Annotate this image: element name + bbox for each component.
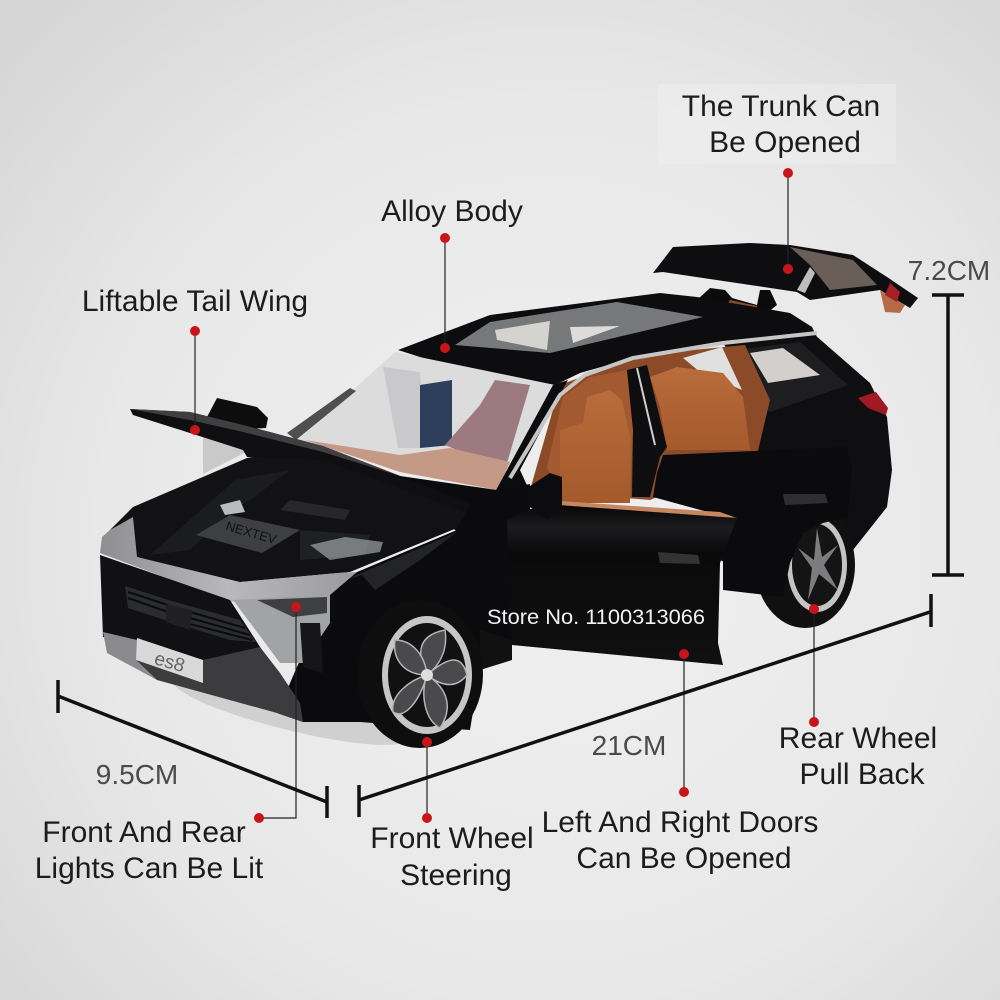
car model: NEXTEV: [224, 518, 279, 547]
windshield: [298, 352, 555, 490]
front seat: [560, 390, 630, 503]
side vent: [300, 623, 323, 673]
roof: [398, 293, 817, 385]
passenger figure: [383, 367, 424, 448]
label: trunk: [658, 84, 896, 274]
sunroof glass: [455, 302, 703, 353]
interior: [530, 345, 770, 500]
label: trunk: Be Opened: [709, 126, 861, 159]
a pillar far side: [287, 388, 356, 440]
fender highlight: [345, 532, 457, 590]
label: trunk: The Trunk Can: [682, 90, 880, 123]
label: alloy body: Alloy Body: [381, 195, 523, 228]
hood: [130, 409, 470, 512]
door pillar: [627, 365, 667, 497]
rear window surround: [735, 342, 848, 412]
coolant tanks: [220, 500, 245, 515]
label: lights: Front And Rear: [42, 816, 246, 849]
rear seats: [650, 367, 750, 450]
rear side window: [750, 348, 820, 383]
rear wheel: [755, 502, 855, 628]
rear quarter body: [720, 335, 892, 600]
a pillar near side: [495, 380, 568, 492]
label: lights: Lights Can Be Lit: [35, 852, 264, 885]
rear opening light: [683, 347, 742, 390]
label: doors: [542, 649, 818, 875]
front face black: [100, 555, 262, 662]
label: front wheel: Steering: [400, 859, 512, 892]
sunroof highlights: [495, 321, 550, 350]
engine bay: [110, 450, 470, 583]
label: tail wing: Liftable Tail Wing: [82, 285, 308, 318]
far side panel: [203, 435, 250, 474]
engine parts: [150, 470, 290, 555]
badge: es8: [152, 648, 187, 677]
grille: [125, 586, 256, 642]
label: tail wing: [82, 285, 308, 435]
engine cover: [196, 515, 300, 553]
dimension: width: [58, 680, 327, 818]
back seats: [547, 370, 633, 500]
lower bumper dark: [136, 640, 303, 722]
label: rear wheel: Pull Back: [799, 758, 926, 791]
tail light: [858, 392, 888, 415]
hood highlight: [130, 409, 400, 476]
watermark: Store No. 1100313066: [487, 606, 705, 629]
label: rear wheel: [779, 604, 937, 791]
label: front wheel: [370, 737, 534, 892]
door mirror: [527, 473, 562, 520]
headlight: [257, 597, 327, 617]
front door: [507, 505, 737, 665]
label: front wheel: Front Wheel: [370, 822, 534, 855]
silver window trim: [510, 333, 817, 478]
trunk lid: [653, 243, 918, 313]
car model: [100, 243, 918, 748]
lower sill: [480, 630, 512, 670]
label: doors: Can Be Opened: [576, 842, 792, 875]
label: alloy body: [381, 195, 523, 353]
front wheel: [357, 600, 483, 748]
rear door handle: [783, 494, 828, 505]
dimension: width: 9.5CM: [96, 759, 178, 790]
far mirror: [207, 398, 268, 430]
label: lights: [35, 602, 301, 885]
front door handle: [658, 552, 700, 564]
dashboard: [305, 440, 510, 490]
dimension: length: 21CM: [592, 730, 666, 761]
dimension: height: 7.2CM: [908, 255, 990, 286]
label: rear wheel: Rear Wheel: [779, 722, 937, 755]
lower bumper light: [103, 632, 157, 680]
label: doors: Left And Right Doors: [542, 806, 818, 839]
chrome headlight pillar: [233, 595, 330, 663]
main body: [277, 493, 520, 730]
floor shadow: [169, 662, 411, 758]
cowl: [400, 476, 530, 532]
dimension: height: [908, 255, 990, 575]
dimension: length: [359, 594, 931, 817]
badge: [136, 638, 203, 683]
trunk strut: [697, 288, 777, 313]
rear door: [653, 447, 852, 597]
chrome band: [100, 517, 357, 602]
door sill: [560, 501, 737, 518]
